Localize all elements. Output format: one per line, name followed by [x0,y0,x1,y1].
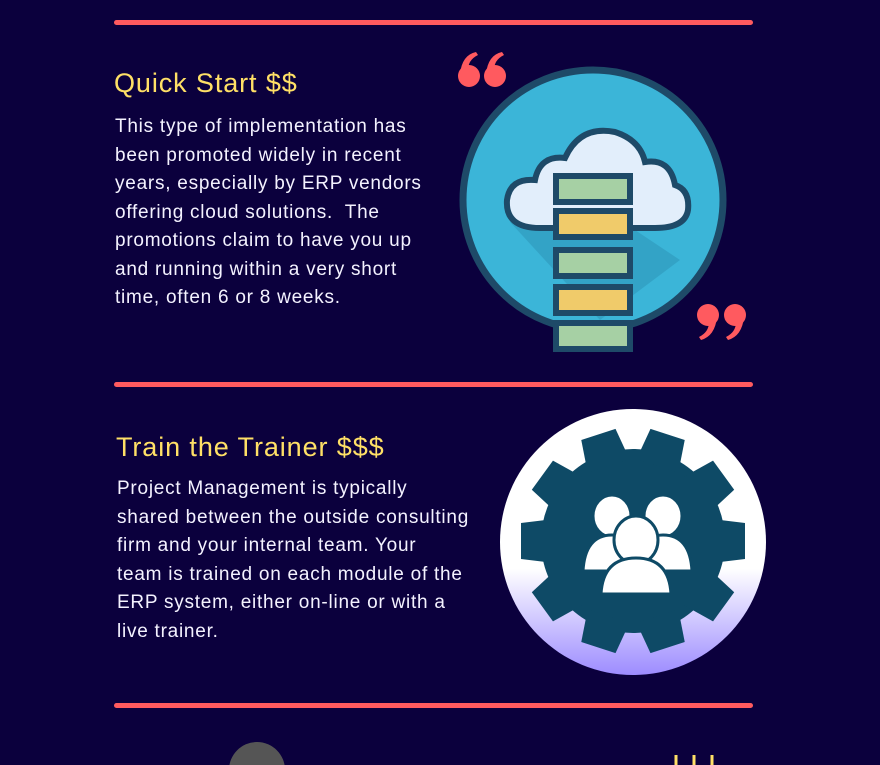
text: Train the Trainer description: shared between the outside consulting [117,506,469,528]
text: Train the Trainer description: ERP system, either on-line or with a [117,592,446,613]
text: Quick Start description: This type of implementation has [115,116,406,137]
heading: Quick Start: Quick Start $$ [114,68,298,98]
text: Quick Start description: been promoted widely in recent [115,144,402,166]
text: Train the Trainer description [117,478,469,642]
heading: Train the Trainer: Train the Trainer $$$ [116,432,385,462]
text: Quick Start description: offering cloud solutions. The [115,202,380,222]
text: Train the Trainer description: live trainer. [117,620,219,642]
text: Train the Trainer description: firm and your internal team. Your [117,535,416,556]
text: Train the Trainer description: team is trained on each module of the [117,564,463,584]
text: Quick Start description: and running within a very short [115,258,397,280]
text: Train the Trainer description: Project Management is typically [117,478,407,499]
icon: gear with people [500,409,766,675]
icon: open quote [458,52,506,87]
icon: close quote [697,304,746,340]
icon: partial yellow marks [674,755,714,765]
text: Quick Start description: years, especially by ERP vendors [115,173,422,194]
icon: partial bottom circle [230,742,284,765]
icon: cloud server with quotes [458,52,746,352]
text: Quick Start description: promotions claim to have you up [115,230,412,251]
text: Quick Start description: time, often 6 or 8 weeks. [115,287,341,308]
text: Quick Start description [115,116,422,308]
